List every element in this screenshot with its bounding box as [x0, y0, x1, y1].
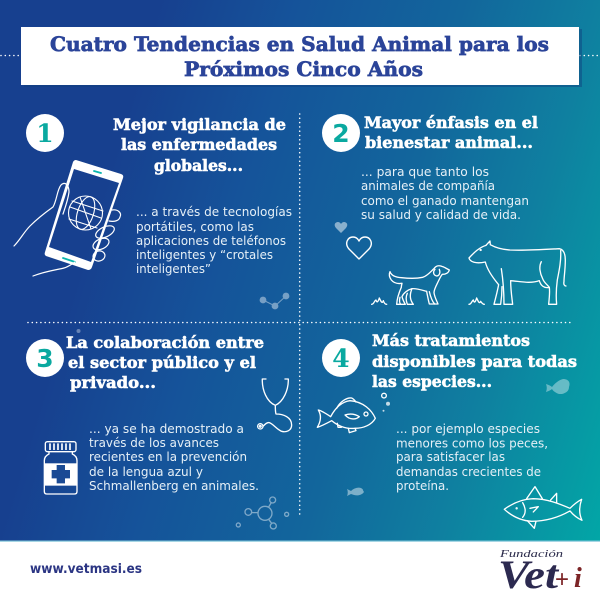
text block 1: inteligentes y “crotales	[136, 248, 273, 262]
icon: hand holding phone with globe	[14, 160, 123, 276]
text block 4: para satisfacer las	[396, 450, 505, 464]
number badge 3: 3	[36, 344, 54, 373]
number badge 2	[322, 114, 360, 152]
text block 4	[396, 422, 548, 493]
heading 4	[372, 331, 577, 391]
icon: fish outline with bubbles	[317, 393, 386, 433]
logo: Fundación Vet+i: +	[555, 566, 569, 593]
title banner	[21, 27, 582, 87]
text block 1: aplicaciones de teléfonos	[136, 234, 286, 248]
text block 3: Schmallenberg en animales.	[89, 479, 259, 493]
panel: trend 3	[26, 329, 292, 529]
text block 2	[361, 165, 529, 222]
text block 2: ... para que tanto los	[361, 165, 489, 179]
icon: molecule small	[260, 293, 289, 309]
text block 1: portátiles, como las	[136, 220, 254, 234]
title banner: Próximos Cinco Años	[184, 57, 423, 81]
text block 3	[89, 422, 259, 493]
text block 2: animales de compañía	[361, 179, 495, 193]
number badge 1: 1	[36, 119, 54, 148]
icon: faded small fish	[347, 488, 364, 496]
text block 4: menores como los peces,	[396, 436, 548, 450]
number badge 4	[322, 339, 360, 377]
heading 2	[364, 113, 538, 152]
number badge 3	[26, 339, 64, 377]
text block 3: recientes en la prevención	[89, 450, 247, 464]
text block 4: proteína.	[396, 479, 449, 493]
heading 1: las enfermedades	[121, 135, 277, 154]
number badge 1	[26, 114, 64, 152]
footer url: www.vetmasi.es	[30, 562, 142, 577]
icon: molecule large	[236, 497, 289, 529]
number badge 2: 2	[332, 119, 350, 148]
heading 2: Mayor énfasis en el	[364, 113, 538, 132]
text block 1: ... a través de tecnologías	[136, 205, 292, 219]
icon: outline heart	[347, 237, 371, 259]
title banner: Cuatro Tendencias en Salud Animal para los	[50, 32, 549, 56]
text block 3: de la lengua azul y	[89, 465, 203, 479]
text block 3: ... ya se ha demostrado a	[89, 422, 244, 436]
text block 2: como el ganado mantengan	[361, 194, 529, 208]
icon: small dot	[76, 329, 80, 333]
text block 1	[136, 205, 292, 276]
text block 4: ... por ejemplo especies	[396, 422, 540, 436]
heading 4: Más tratamientos	[372, 331, 530, 350]
text block 2: su salud y calidad de vida.	[361, 208, 521, 222]
text block 1: inteligentes”	[136, 262, 211, 276]
panel: trend 2	[322, 113, 566, 304]
heading 2: bienestar animal...	[365, 133, 533, 152]
heading 3	[66, 333, 264, 392]
icon: tuna outline	[504, 487, 582, 528]
logo: Fundación Vet+i: Vet	[498, 552, 560, 597]
footer band	[0, 540, 600, 600]
text block 4: demandas crecientes de	[396, 465, 541, 479]
text block 3: través de los avances	[89, 436, 219, 450]
panel: trend 4	[317, 331, 582, 528]
panel: trend 1	[14, 114, 292, 309]
heading 1: globales...	[154, 156, 243, 175]
icon: small filled heart	[335, 222, 347, 233]
number badge 4: 4	[332, 344, 350, 373]
heading 4: las especies...	[372, 372, 492, 391]
icon: faded fish	[546, 379, 570, 394]
icon: bubbles	[382, 402, 390, 412]
icon: dog and cow	[372, 241, 566, 304]
icon: stethoscope	[258, 379, 292, 432]
heading 4: disponibles para todas	[372, 352, 577, 371]
logo: Fundación Vet+i	[498, 548, 582, 597]
heading 3: La colaboración entre	[66, 333, 264, 352]
heading 3: el sector público y el	[68, 353, 256, 372]
heading 1	[113, 115, 286, 175]
heading 3: privado...	[70, 373, 156, 392]
icon: medicine bottle	[44, 442, 77, 494]
heading 1: Mejor vigilancia de	[113, 115, 286, 134]
logo: Fundación Vet+i: Fundación	[499, 548, 564, 560]
logo: Fundación Vet+i: i	[574, 563, 582, 594]
